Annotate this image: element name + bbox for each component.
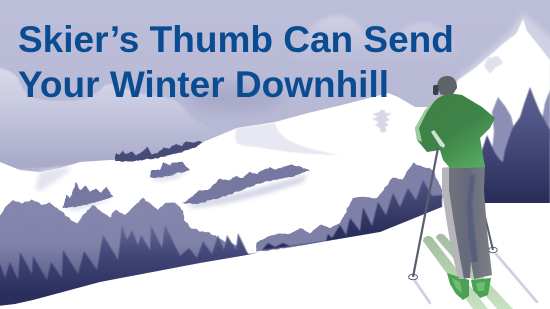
main snow slope [0,93,450,309]
title: Skier’s Thumb Can Send [18,19,454,60]
arm gap [431,130,445,148]
slope shadows [35,123,340,210]
pants stripe [442,167,464,279]
jacket [415,93,495,168]
tree stand: small island [150,162,190,178]
dark trees right of skier [482,87,550,204]
distant snow mountain [440,19,550,205]
foreground snow [0,203,550,309]
left ski pole [408,148,438,280]
skier [415,76,495,300]
tree stand: top ridge [115,141,203,161]
pole shadows [415,254,537,303]
boot highlights [452,278,485,293]
right ski pole [481,200,497,253]
title: Your Winter Downhill [18,64,389,105]
lavender forest band right [256,163,442,252]
right ski [436,234,513,309]
mountain rock patch [484,56,503,74]
pants centre shadow [467,175,478,262]
tree stand: left island [63,182,113,208]
left ski [423,236,488,309]
tree stand: long island [182,165,310,204]
pants [442,164,492,279]
head [437,76,457,95]
lavender forest band [0,198,250,309]
ghost tree on hill [372,110,392,133]
pale trees right of skier [490,90,550,175]
clouds right [247,16,458,79]
left cloud [0,66,220,170]
mountain halo [450,13,550,110]
cloud shadow [187,84,283,112]
dark foreground trees left [0,225,258,309]
goggles [433,85,438,95]
jacket left highlight [415,99,436,142]
boots [447,273,491,300]
dark trees on centre ridge [262,180,442,250]
